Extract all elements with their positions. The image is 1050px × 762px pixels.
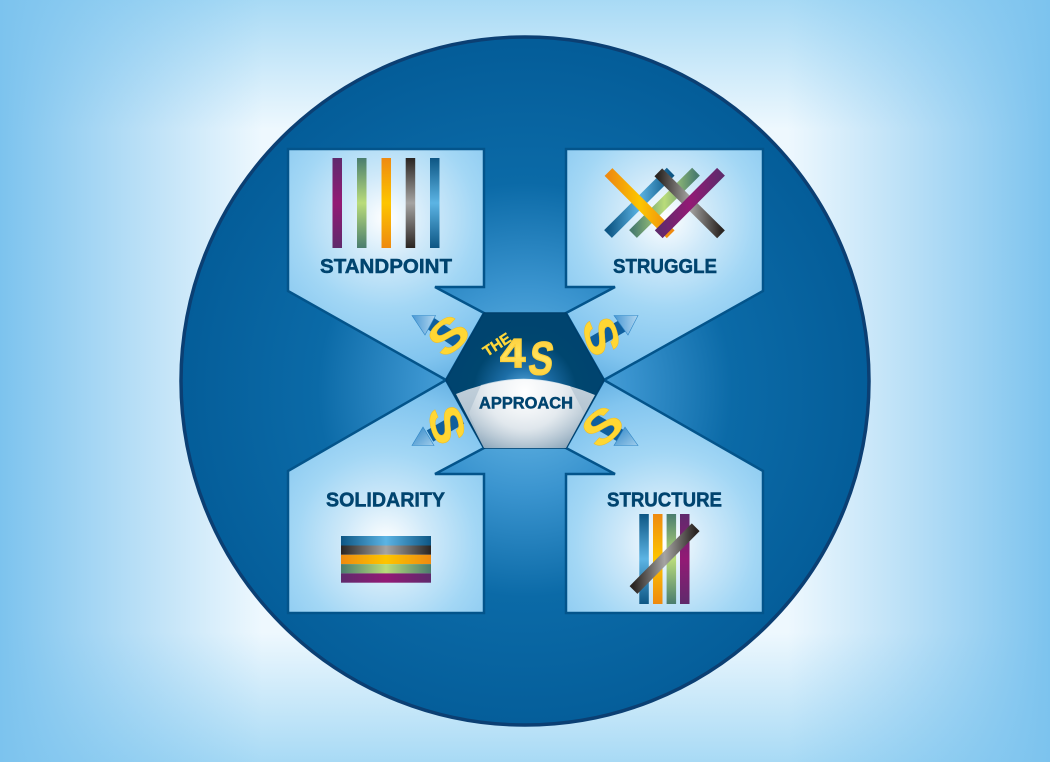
label: solidarity: SOLIDARITY	[326, 488, 445, 512]
icon: standpoint bars	[332, 158, 440, 248]
label: standpoint: STANDPOINT	[320, 255, 452, 278]
arrow: lower right: S	[572, 395, 634, 459]
label: 4S: 4	[500, 331, 526, 376]
arrow: upper left: S	[418, 304, 480, 368]
center hexagon	[446, 313, 604, 448]
panel: solidarity	[288, 380, 484, 613]
arrow: lower left: S	[416, 400, 476, 450]
panel: standpoint	[288, 149, 484, 380]
label: 4S	[500, 331, 557, 384]
panel: struggle	[566, 149, 763, 380]
label: approach: APPROACH	[479, 394, 573, 412]
panel: structure	[566, 380, 763, 613]
hexagon lower dome	[456, 380, 595, 448]
label: 4S: S	[526, 332, 557, 384]
arrow: upper right: S	[571, 311, 630, 362]
label: structure: STRUCTURE	[607, 488, 722, 512]
icon: solidarity stacked bars	[341, 536, 431, 583]
label: the: THE	[480, 330, 514, 360]
icon: struggle crossed bars	[608, 172, 721, 234]
main circle	[181, 37, 869, 725]
icon: structure bars with diagonal	[634, 514, 696, 604]
label: struggle: STRUGGLE	[613, 255, 717, 278]
